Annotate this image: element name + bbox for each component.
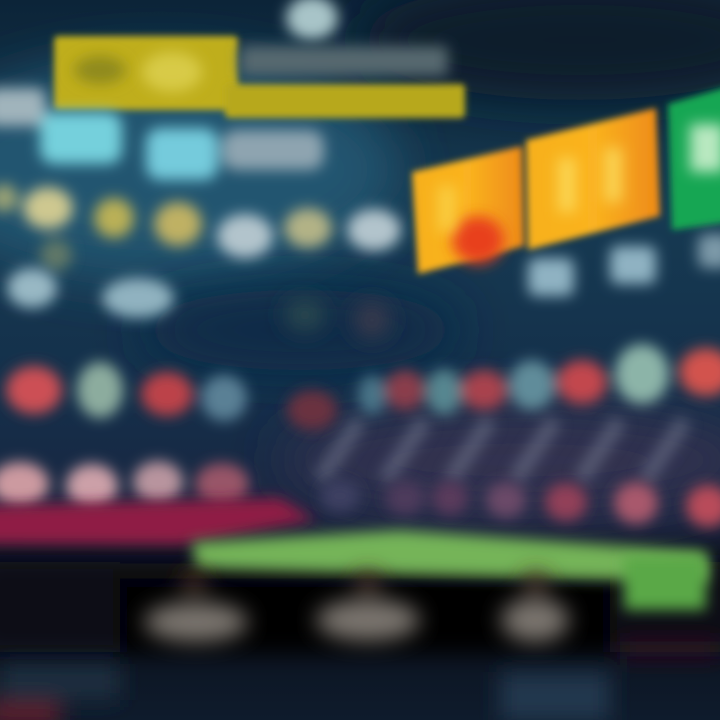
icon row: dim mid markers <box>285 299 390 338</box>
panel: orange block detail marks <box>438 148 622 232</box>
icon row: cloud icons <box>7 268 174 318</box>
red flame mark <box>452 216 504 264</box>
panel: dark lower section <box>0 562 720 654</box>
banner: green bar <box>192 530 708 610</box>
subtitle: cyan highlights <box>0 88 324 180</box>
panel: green block <box>668 86 720 230</box>
chart: row of red and teal markers <box>6 344 720 430</box>
title: yellow heading <box>54 36 465 118</box>
icon row: upper left icons <box>0 184 401 271</box>
chart: diagonal bars right <box>320 420 685 480</box>
icon: top circle <box>286 0 338 40</box>
panel: orange chart blocks <box>412 108 660 274</box>
banner: crimson bar <box>0 498 315 545</box>
icon row: small labels under blocks <box>528 234 720 296</box>
chart: lower row markers <box>0 461 720 527</box>
footer: blue and red marks <box>0 640 720 720</box>
icon row: grey pods on dark panel <box>144 572 569 642</box>
